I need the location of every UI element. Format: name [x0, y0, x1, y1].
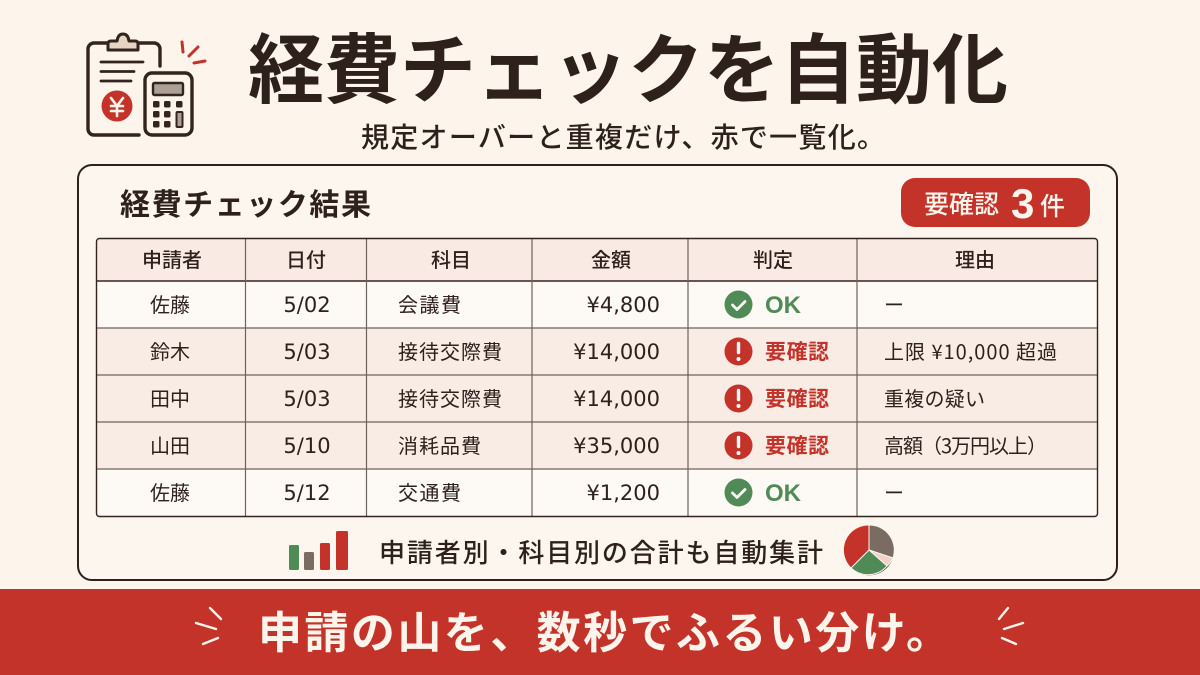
icon: check	[724, 290, 752, 318]
row: 鈴木 needs review: 鈴木	[150, 336, 190, 365]
icon: left sparks	[196, 608, 221, 644]
row: 佐藤 OK: OK	[765, 480, 802, 507]
row: 佐藤 OK: 5/02	[283, 293, 331, 317]
row: 佐藤 OK: 5/12	[283, 481, 331, 505]
row: 佐藤 OK: OK	[765, 292, 802, 319]
row: 佐藤 OK	[150, 289, 904, 319]
row: 山田 needs review: 消耗品費	[398, 430, 481, 459]
table header row: 申請者	[142, 244, 202, 273]
row: 山田 needs review	[150, 430, 1047, 460]
icon: clipboard and calculator	[88, 34, 205, 135]
row: 佐藤 OK: ー	[884, 477, 904, 506]
row: 佐藤 OK: 会議費	[398, 289, 461, 318]
row: 鈴木 needs review: ¥14,000	[573, 340, 660, 364]
table header row: 理由	[955, 244, 995, 273]
icon: check	[724, 478, 752, 506]
row: 田中 needs review: ¥14,000	[573, 387, 660, 411]
icon: alert	[724, 338, 752, 366]
row: 佐藤 OK	[150, 477, 904, 507]
row: 鈴木 needs review	[150, 336, 1057, 366]
row: 田中 needs review: 重複の疑い	[884, 383, 985, 412]
subtitle: 規定オーバーと重複だけ、赤で一覧化。	[361, 116, 885, 156]
row: 佐藤 OK: ¥4,800	[587, 293, 660, 317]
row: 山田 needs review: 山田	[150, 430, 190, 459]
row: 山田 needs review: 要確認	[765, 430, 829, 460]
panel heading: 経費チェック結果	[120, 180, 371, 224]
panel: expense check results	[78, 165, 1117, 580]
row: 山田 needs review: ¥35,000	[573, 434, 660, 458]
row: 田中 needs review: 5/03	[283, 387, 331, 411]
icon: pie chart	[843, 525, 894, 575]
row: 田中 needs review: 接待交際費	[398, 383, 502, 412]
bottom banner	[0, 589, 1200, 675]
icon: right sparks	[999, 608, 1023, 644]
row: 佐藤 OK: 佐藤	[150, 289, 190, 318]
icon: alert	[724, 384, 752, 412]
row: 佐藤 OK: ー	[884, 289, 904, 318]
row: 鈴木 needs review: 上限 ¥10,000 超過	[884, 336, 1057, 365]
table header row: 日付	[286, 244, 326, 273]
row: 田中 needs review: 要確認	[765, 383, 829, 413]
table header row: 金額	[591, 244, 631, 273]
row: 佐藤 OK: 佐藤	[150, 477, 190, 506]
row: 佐藤 OK: ¥1,200	[587, 481, 660, 505]
table header row: 科目	[431, 244, 471, 273]
badge: 3 items to confirm: 3	[1011, 180, 1034, 227]
row: 山田 needs review: 高額（3万円以上）	[884, 430, 1047, 459]
icon: bar chart	[289, 531, 348, 570]
row: 田中 needs review	[150, 383, 985, 413]
table: expense records	[96, 238, 1098, 516]
icon: alert	[724, 432, 752, 460]
badge: 3 items to confirm: 件	[1040, 187, 1065, 223]
summary text: 申請者別・科目別の合計も自動集計	[379, 533, 823, 570]
row: 田中 needs review: 田中	[150, 383, 190, 412]
table header row: 判定	[753, 244, 793, 273]
row: 山田 needs review: 5/10	[283, 434, 331, 458]
banner text: 申請の山を、数秒でふるい分け。	[258, 597, 950, 661]
badge: 3 items to confirm: 要確認	[924, 185, 999, 221]
title: 経費チェックを自動化	[248, 9, 1008, 119]
row: 佐藤 OK: 交通費	[398, 477, 461, 506]
badge: 3 items to confirm	[901, 178, 1090, 227]
table header row	[142, 244, 995, 273]
row: 鈴木 needs review: 接待交際費	[398, 336, 502, 365]
row: 鈴木 needs review: 5/03	[283, 340, 331, 364]
row: 鈴木 needs review: 要確認	[765, 336, 829, 366]
